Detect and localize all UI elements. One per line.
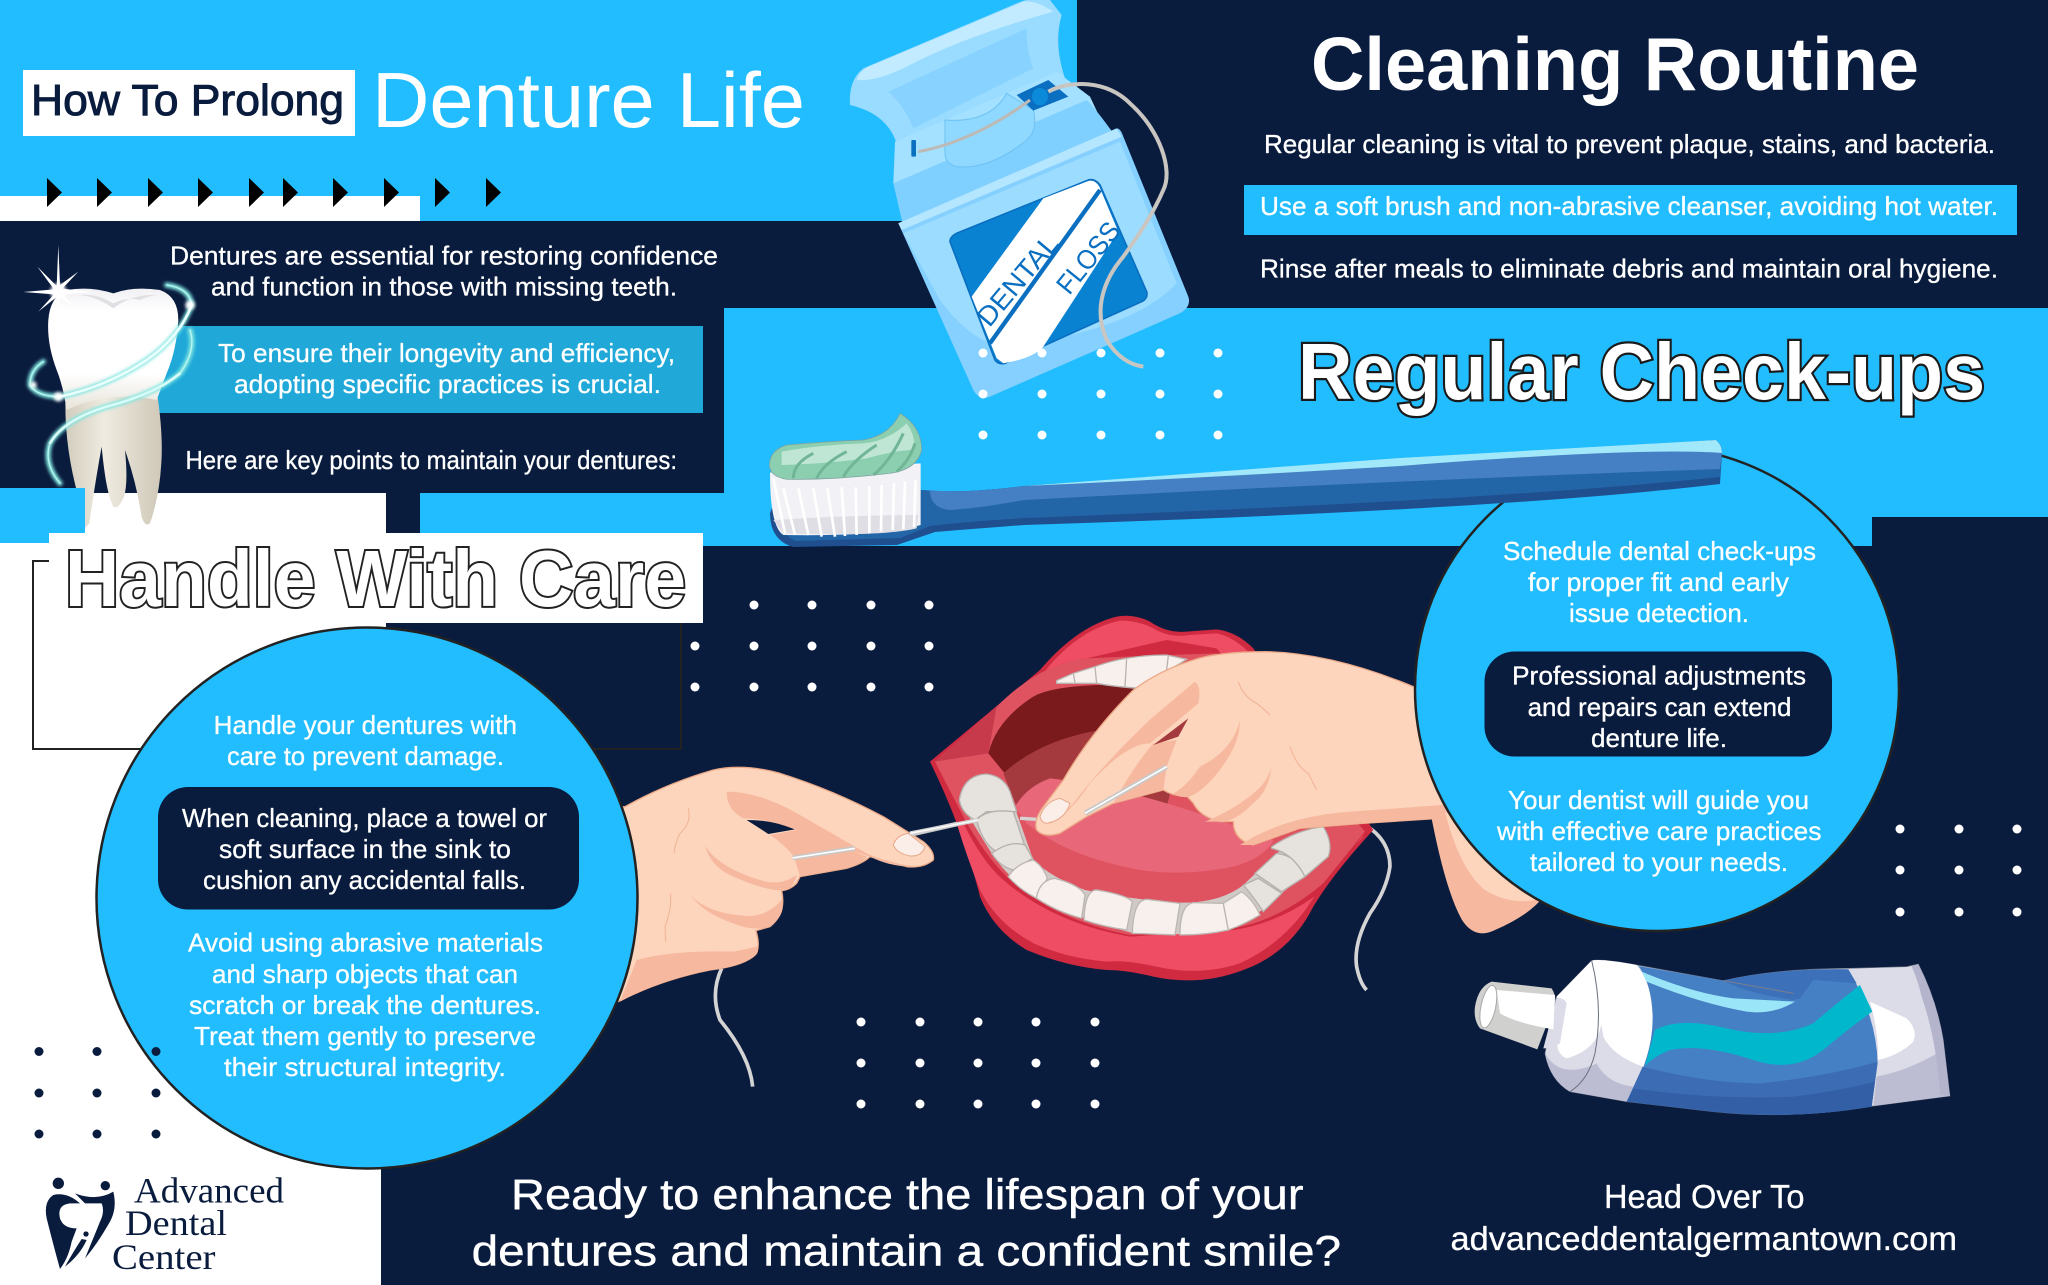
heading and text: Cleaning Routine: Rinse after meals to eliminate debris and maintain oral hygiene. [1260,254,1998,284]
panel: handle with care circle: Treat them gently to preserve [194,1021,536,1051]
intro panel: Dentures are essential for restoring confidence [170,240,718,270]
icon: toothpaste tube [1475,960,1950,1115]
title: How To Prolong Denture Life [23,56,805,144]
logo: Advanced Dental Center: Advanced [134,1170,284,1210]
heading: Handle With Care [33,533,703,749]
panel: regular check-ups circle: with effective care practices [1496,816,1822,846]
dot grid: bottom centre [856,1018,1100,1108]
panel: handle with care circle: soft surface in the sink to [219,834,511,864]
icon: hand heel under right circle [1430,810,1545,933]
panel: handle with care circle: their structural integrity. [224,1052,506,1082]
intro panel: and function in those with missing teeth. [211,272,677,302]
dot grid: right [1896,824,2022,916]
heading: Handle With Care: Handle With Care [65,534,686,623]
icon: toothbrush [769,413,1722,547]
panel: handle with care circle: scratch or break the dentures. [189,990,541,1020]
intro panel: To ensure their longevity and efficiency, [218,338,675,368]
panel: regular check-ups circle: for proper fit and early [1528,567,1789,597]
arrow row [47,178,501,207]
panel: regular check-ups circle: tailored to your needs. [1530,847,1788,877]
panel: regular check-ups circle [1415,447,1899,931]
heading: Regular Check-ups: Regular Check-ups [1298,327,1985,416]
call to action [472,1171,1341,1276]
panel: handle with care circle: Handle your dentures with [214,710,517,740]
icon: dental floss box: FLOSS [1050,215,1126,300]
intro panel [157,240,718,475]
icon: open mouth with right hand flossing [910,616,1467,990]
panel: handle with care circle: cushion any accidental falls. [203,865,526,895]
panel: regular check-ups circle: Schedule dental check-ups [1503,536,1816,566]
title: How To Prolong Denture Life: How To Prolong [31,76,344,125]
call to action: dentures and maintain a confident smile? [472,1228,1341,1276]
intro panel: Here are key points to maintain your dentures: [186,445,677,475]
heading and text: Cleaning Routine [1244,22,2017,284]
website link: advanceddentalgermantown.com [1450,1220,1957,1257]
panel: handle with care circle [96,628,638,1168]
dot grid: navy left [34,1047,160,1138]
website link: Head Over To [1604,1178,1804,1215]
icon: shining tooth [23,245,195,528]
website link [1450,1178,1957,1257]
title: How To Prolong Denture Life: Denture Life [372,56,805,144]
icon: left hand holding floss [600,767,960,1087]
dot grid: centre [690,600,934,692]
icon: dental floss box [850,0,1189,398]
logo: Advanced Dental Center: Center [112,1237,216,1277]
heading and text: Cleaning Routine: Use a soft brush and non-abrasive cleanser, avoiding hot water. [1260,191,1998,221]
panel: regular check-ups circle: Your dentist will guide you [1508,785,1809,815]
icon: dental floss box: DENTAL [970,228,1065,332]
heading and text: Cleaning Routine: Regular cleaning is vital to prevent plaque, stains, and bacteria. [1264,129,1995,159]
intro panel: adopting specific practices is crucial. [234,369,661,399]
call to action: Ready to enhance the lifespan of your [511,1171,1304,1219]
panel: regular check-ups circle: issue detection. [1569,598,1749,628]
dot grid: upper blue [978,348,1222,440]
panel: handle with care circle: care to prevent damage. [227,741,504,771]
panel: regular check-ups circle: and repairs can extend [1528,692,1792,722]
logo: Advanced Dental Center: Dental [125,1203,227,1243]
panel: regular check-ups circle: denture life. [1591,723,1727,753]
panel: regular check-ups circle: Professional adjustments [1512,660,1806,690]
heading and text: Cleaning Routine: Cleaning Routine [1311,22,1919,106]
panel: handle with care circle: When cleaning, place a towel or [182,803,547,833]
logo: Advanced Dental Center [46,1170,284,1277]
panel: handle with care circle: and sharp objects that can [212,959,518,989]
panel: handle with care circle: Avoid using abrasive materials [188,928,543,958]
